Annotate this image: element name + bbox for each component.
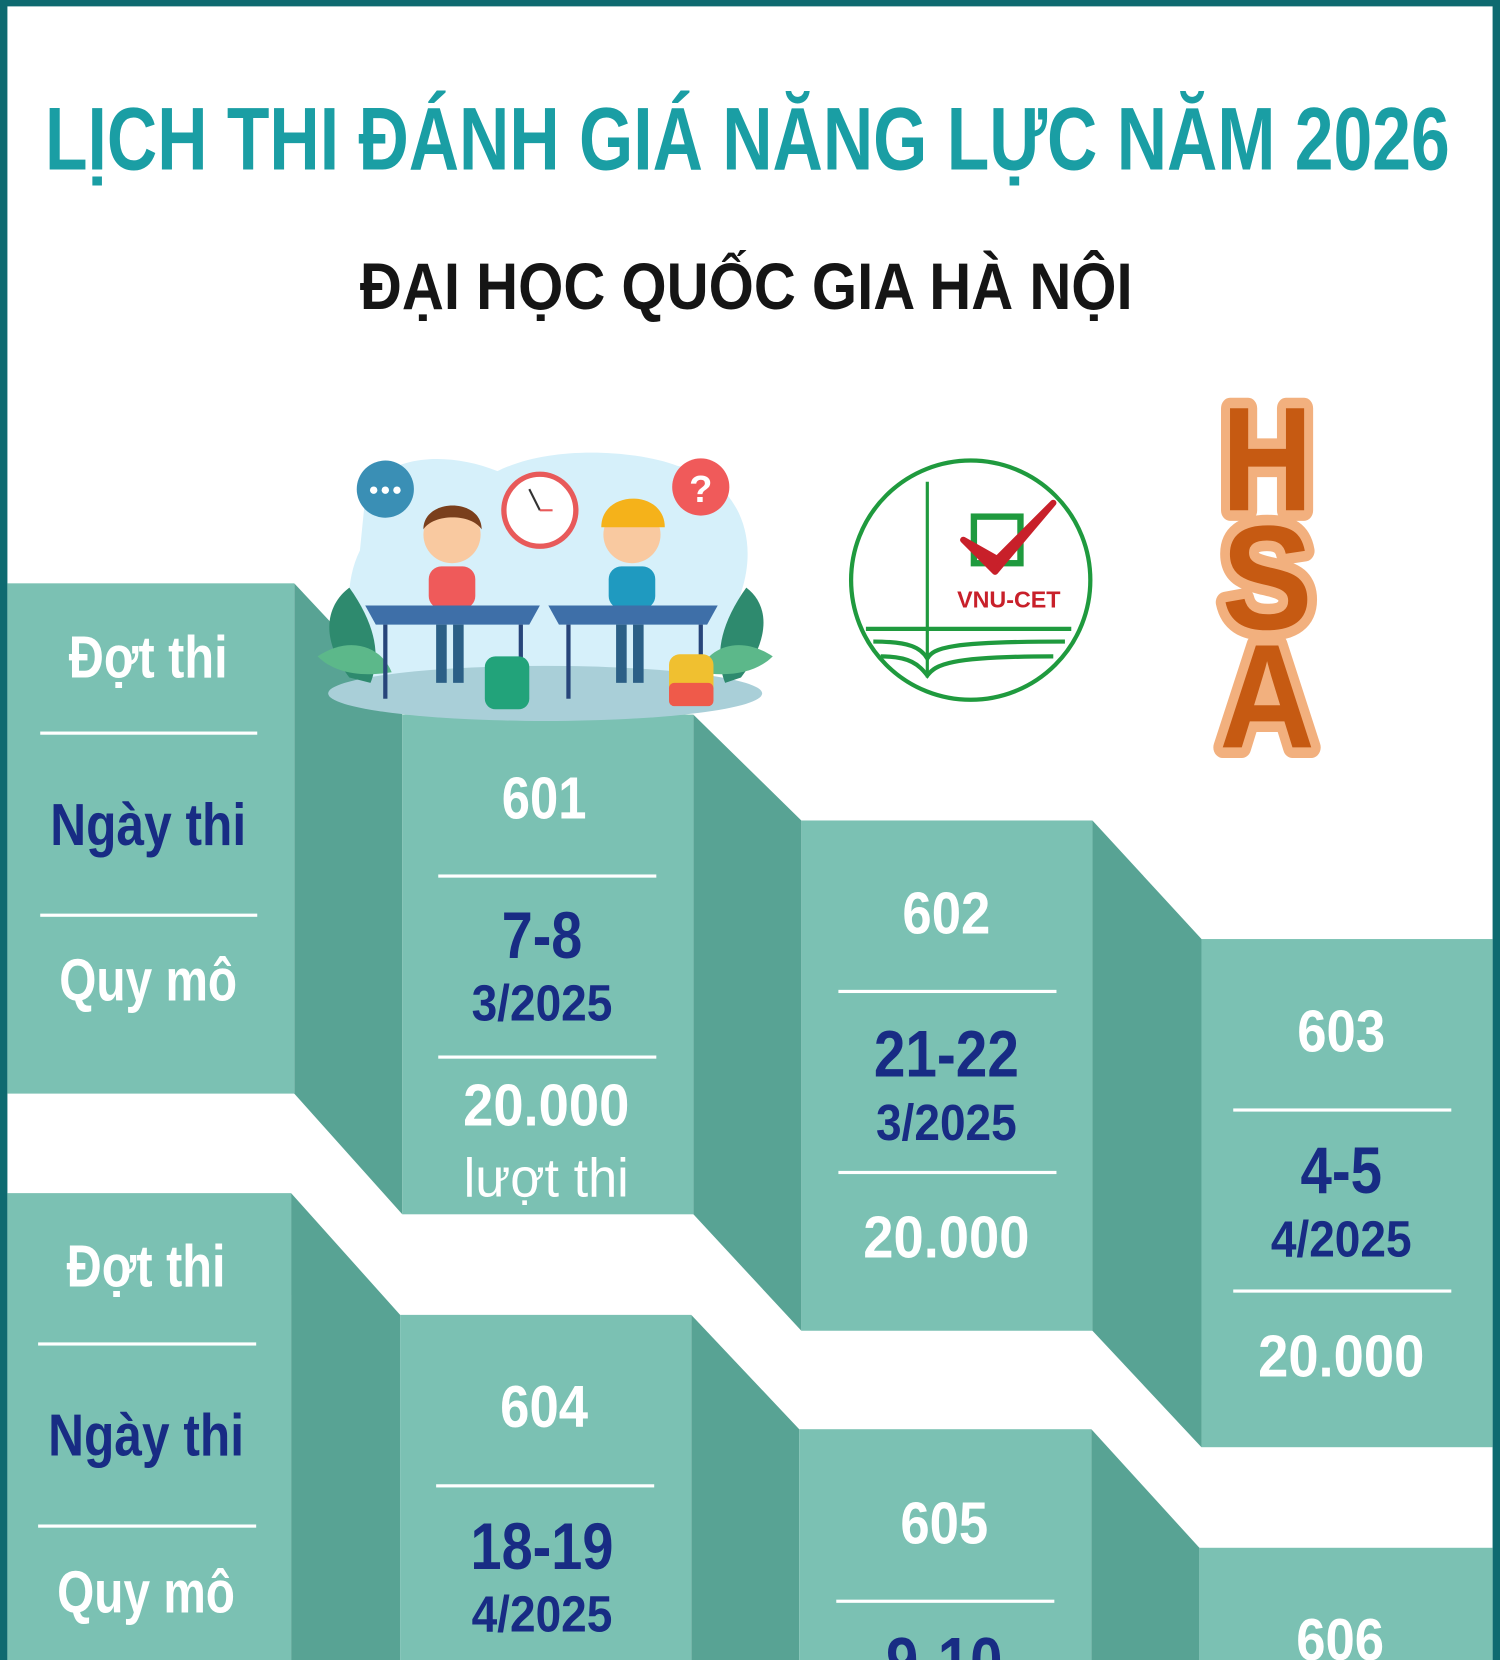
column 3 row 2: 606 [1199, 1548, 1493, 1660]
column 0 row 1: Đợt thi [69, 624, 228, 691]
column 0 row 2: Quy mô [57, 1558, 235, 1625]
column 1 row 1: 601: 3/2025 [472, 975, 612, 1032]
column 2 row 1: 602: 3/2025 [876, 1094, 1017, 1151]
column 2 row 2: 605: 605 [900, 1490, 988, 1557]
logo: HSA: S [1222, 496, 1313, 661]
column 0 row 2 [7, 1193, 400, 1660]
column 1 row 1: 601 [402, 715, 801, 1331]
column 3 row 1: 603: 20.000 [1258, 1322, 1424, 1389]
column 3 row 1: 603: 4-5 [1300, 1134, 1382, 1207]
column 1 row 2: 604 [400, 1315, 799, 1660]
logo: HSA [1219, 377, 1315, 779]
staircase row 2 [7, 1193, 1493, 1660]
staircase row 1 [7, 583, 1493, 1447]
subtitle: ĐẠI HỌC QUỐC GIA HÀ NỘI [360, 250, 1133, 323]
column 0 row 2: Ngày thi [48, 1402, 244, 1469]
column 1 row 1: 601: lượt thi [464, 1146, 629, 1208]
column 1 row 1: 601: 20.000 [463, 1071, 629, 1138]
column 3 row 1: 603: 603 [1297, 997, 1385, 1064]
column 0 row 1: Quy mô [59, 946, 237, 1013]
column 2 row 1: 602 [801, 820, 1201, 1447]
column 2 row 1: 602: 21-22 [874, 1018, 1019, 1091]
column 2 row 1: 602: 20.000 [863, 1204, 1029, 1271]
column 3 row 1: 603: 4/2025 [1271, 1211, 1412, 1268]
column 2 row 1: 602: 602 [902, 880, 990, 947]
column 0 row 2: Đợt thi [67, 1232, 225, 1299]
logo: VNU-CET [851, 461, 1090, 700]
column 1 row 1: 601: 601 [502, 764, 586, 831]
column 1 row 2: 604: 4/2025 [472, 1585, 612, 1642]
column 1 row 2: 604: 18-19 [471, 1510, 613, 1583]
column 2 row 2: 605 [799, 1429, 1199, 1660]
column 3 row 1: 603 [1201, 939, 1493, 1447]
logo: HSA: A [1219, 614, 1315, 779]
column 1 row 2: 604: 604 [500, 1373, 588, 1440]
column 0 row 1: Ngày thi [50, 791, 246, 858]
logo: VNU-CET: VNU-CET [957, 587, 1061, 613]
column 0 row 1 [7, 583, 402, 1214]
logo: HSA: H [1222, 377, 1313, 542]
illustration: students at desks [318, 453, 773, 721]
illustration: students at desks: ? [689, 469, 712, 511]
column 1 row 1: 601: 7-8 [502, 899, 582, 972]
